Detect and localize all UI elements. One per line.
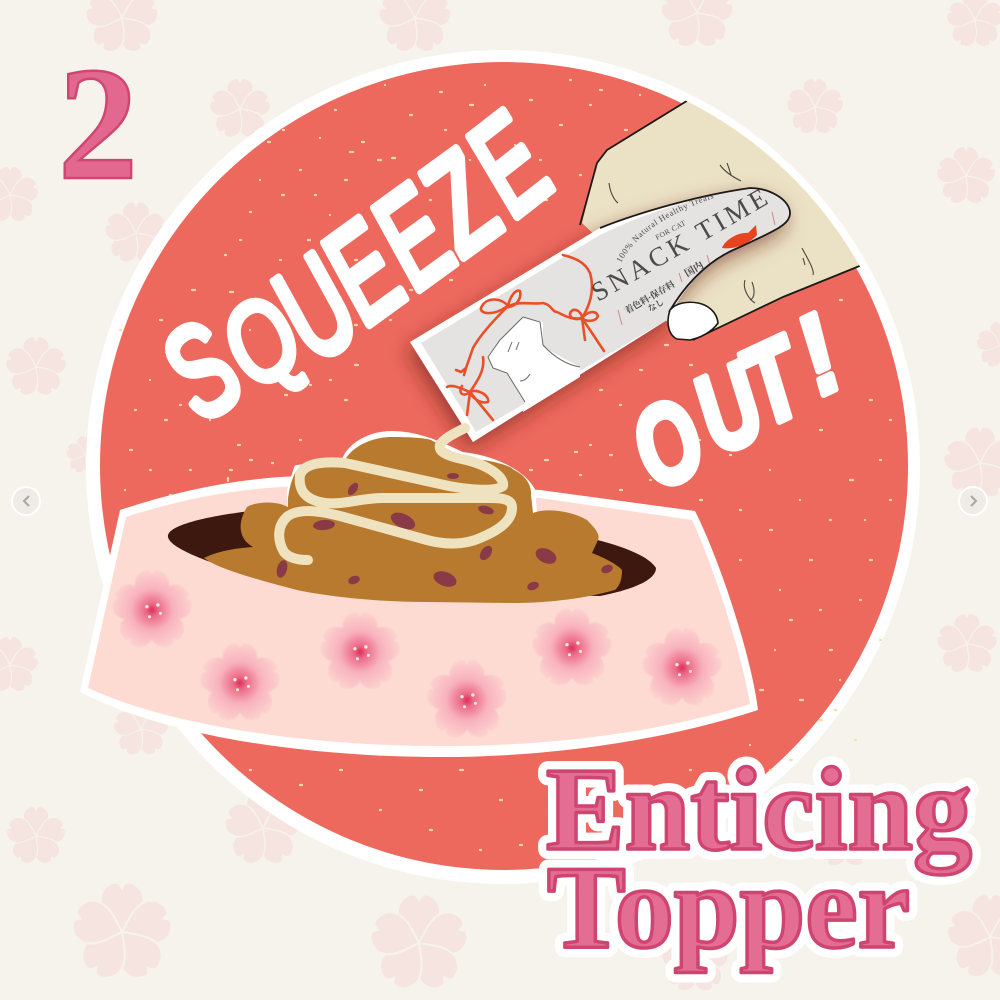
icon: red fish <box>722 225 757 248</box>
blossom 1 <box>109 570 195 653</box>
heading: SQUEEZE: E <box>440 87 579 242</box>
bowl pink body <box>88 486 750 746</box>
heading: SQUEEZE: E <box>295 194 432 351</box>
step number 2: 2 <box>58 35 138 214</box>
heading: SQUEEZE: S <box>136 297 266 447</box>
pouch text: SNACK TIME <box>586 182 772 307</box>
title outline: Enticing <box>546 743 972 875</box>
food white halo <box>290 434 534 512</box>
pouch text: 100% Natural Healthy Treats <box>617 196 714 262</box>
title outline <box>546 743 972 973</box>
title: Enticing Topper <box>546 743 972 973</box>
heading: SQUEEZE: Q <box>199 272 325 412</box>
heading: SQUEEZE: Z <box>391 125 529 282</box>
hand <box>579 100 860 341</box>
pouch text: 着色料·保存料 <box>622 278 676 316</box>
blossom 5 <box>529 608 615 691</box>
pouch text: なし <box>646 297 666 314</box>
cream topper drizzle <box>279 428 512 560</box>
blossom 6 <box>639 628 725 711</box>
blossom 4 <box>424 660 510 743</box>
title fill: Enticing <box>546 743 972 875</box>
bowl white outline <box>80 476 758 757</box>
bowl dark opening <box>168 506 656 596</box>
blossom 3 <box>317 612 403 695</box>
food bowl <box>80 428 758 757</box>
thumbnail <box>668 302 718 340</box>
pouch label area <box>421 188 790 432</box>
cat illustration <box>488 317 580 412</box>
red bean pieces <box>275 473 614 592</box>
title fill <box>546 743 972 973</box>
wet food mound <box>204 437 622 603</box>
coral circle <box>100 62 908 870</box>
blossom 2 <box>197 643 283 726</box>
speckles <box>120 80 891 850</box>
heading: OUT! <box>612 292 859 514</box>
heading: OUT!: O <box>612 374 722 514</box>
heading: OUT!: T <box>722 311 827 450</box>
pouch body <box>410 188 790 442</box>
heading: OUT!: ! <box>778 292 859 418</box>
white circle ring <box>86 50 920 884</box>
title fill: Topper <box>547 841 910 973</box>
heading: OUT!: U <box>675 339 783 478</box>
carousel arrow right <box>959 487 987 515</box>
heading: SQUEEZE <box>136 87 579 447</box>
heading: SQUEEZE: U <box>245 230 385 389</box>
red ribbons <box>447 255 604 420</box>
thumb outline <box>600 188 790 312</box>
heading: SQUEEZE: E <box>345 159 482 316</box>
pouch text: FOR CAT <box>654 218 687 242</box>
pouch text: 国内 <box>682 258 706 280</box>
carousel arrow left <box>12 487 40 515</box>
title outline: Topper <box>547 841 910 973</box>
snack pouch <box>399 182 798 455</box>
